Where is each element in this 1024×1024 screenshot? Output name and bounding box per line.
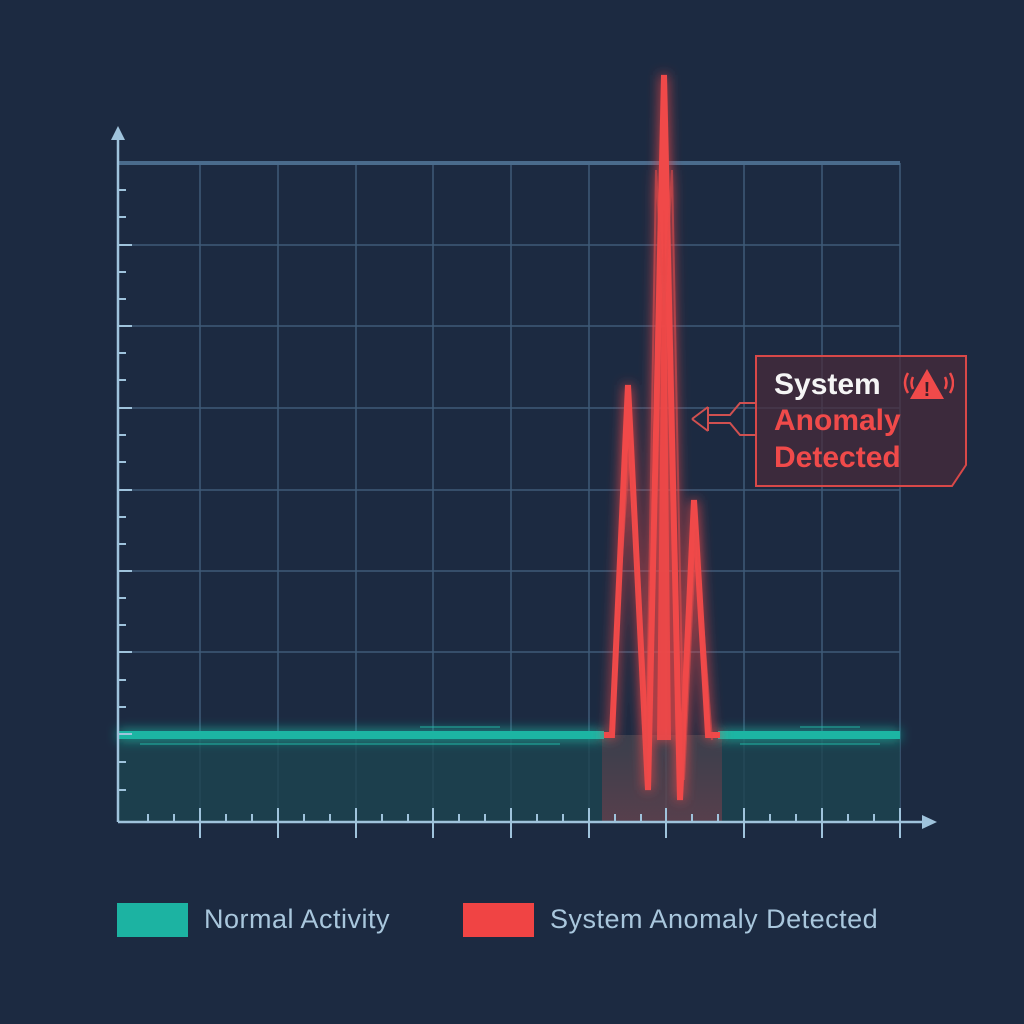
icon: warning (904, 369, 954, 401)
icon: warning: ! (924, 379, 930, 401)
callout: anomaly (692, 355, 967, 487)
callout: anomaly: Detected (774, 441, 901, 474)
legend item: normal (117, 903, 390, 937)
legend item: anomaly (463, 903, 878, 937)
legend item: anomaly: System Anomaly Detected (550, 904, 878, 934)
callout: anomaly: System (774, 368, 881, 401)
legend (117, 903, 878, 937)
normal activity area (118, 727, 900, 822)
legend item: normal: Normal Activity (204, 904, 390, 934)
callout: anomaly: Anomaly (774, 404, 901, 437)
axes (111, 126, 937, 838)
anomaly waveform (604, 75, 720, 800)
